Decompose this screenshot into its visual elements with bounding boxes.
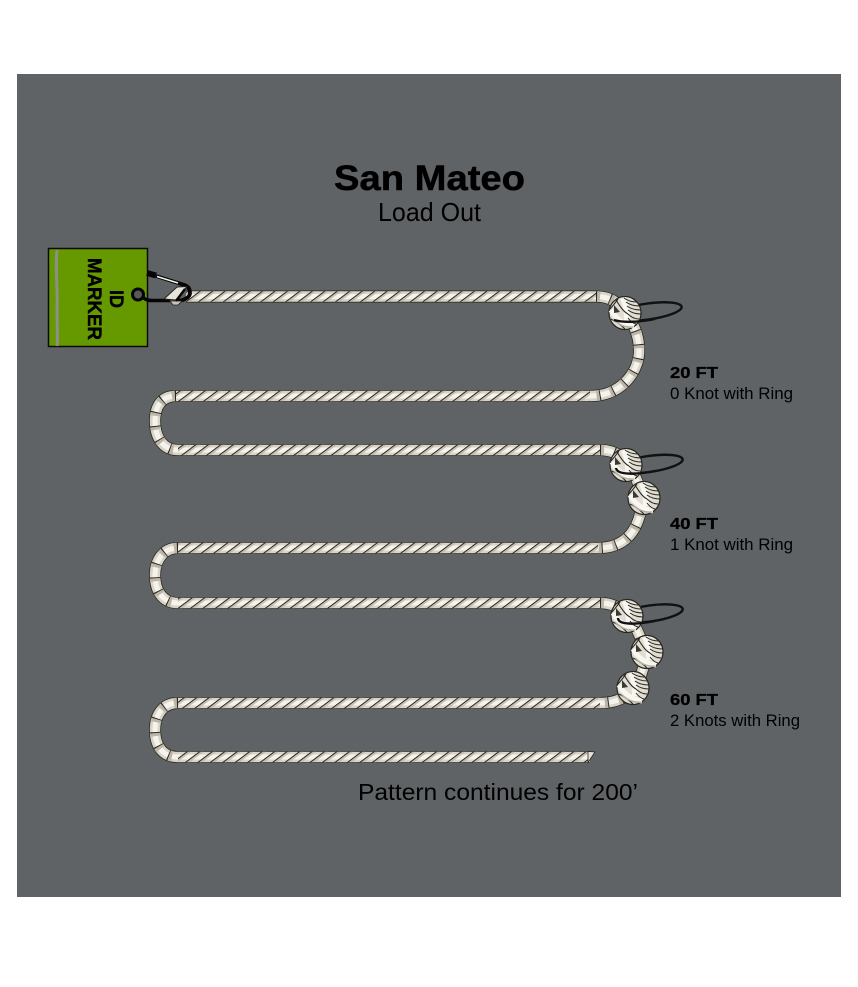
label: 60 ft bbox=[670, 692, 800, 730]
knot at 40 ft with ring bbox=[610, 448, 642, 482]
ring at 60 ft (front) bbox=[618, 618, 655, 624]
first knot at 60 ft bbox=[631, 636, 663, 668]
label: 40 ft: 1 Knot with Ring bbox=[670, 535, 793, 554]
rope end tip bbox=[588, 752, 595, 762]
carabiner bbox=[132, 273, 190, 305]
ID marker tag bbox=[48, 248, 148, 346]
knot at 20 ft bbox=[609, 296, 641, 330]
single knot at 40 ft bbox=[628, 482, 660, 514]
rope bbox=[155, 296, 644, 762]
label: 60 ft: 2 Knots with Ring bbox=[670, 711, 800, 730]
tag label bbox=[83, 258, 126, 340]
pattern note: Pattern continues for 200’ bbox=[358, 779, 638, 805]
subtitle: Load Out bbox=[378, 197, 482, 227]
title: San Mateo bbox=[334, 159, 525, 198]
second knot at 60 ft bbox=[617, 672, 649, 704]
ring at 60 ft (back) bbox=[616, 601, 684, 626]
tag label: ID bbox=[105, 290, 126, 308]
ring at 40 ft (back) bbox=[614, 451, 684, 477]
label: 20 ft bbox=[670, 365, 793, 403]
ring at 20 ft (back) bbox=[613, 299, 683, 324]
tag label: MARKER bbox=[83, 258, 104, 340]
knot at 60 ft with ring bbox=[611, 600, 643, 632]
label: 20 ft: 0 Knot with Ring bbox=[670, 384, 793, 403]
label: 60 ft: 60 FT bbox=[670, 692, 718, 709]
label: 40 ft: 40 FT bbox=[670, 516, 718, 533]
label: 40 ft bbox=[670, 516, 793, 554]
ring at 40 ft (front) bbox=[616, 468, 655, 474]
ring at 20 ft (front) bbox=[614, 319, 655, 322]
label: 20 ft: 20 FT bbox=[670, 365, 718, 382]
